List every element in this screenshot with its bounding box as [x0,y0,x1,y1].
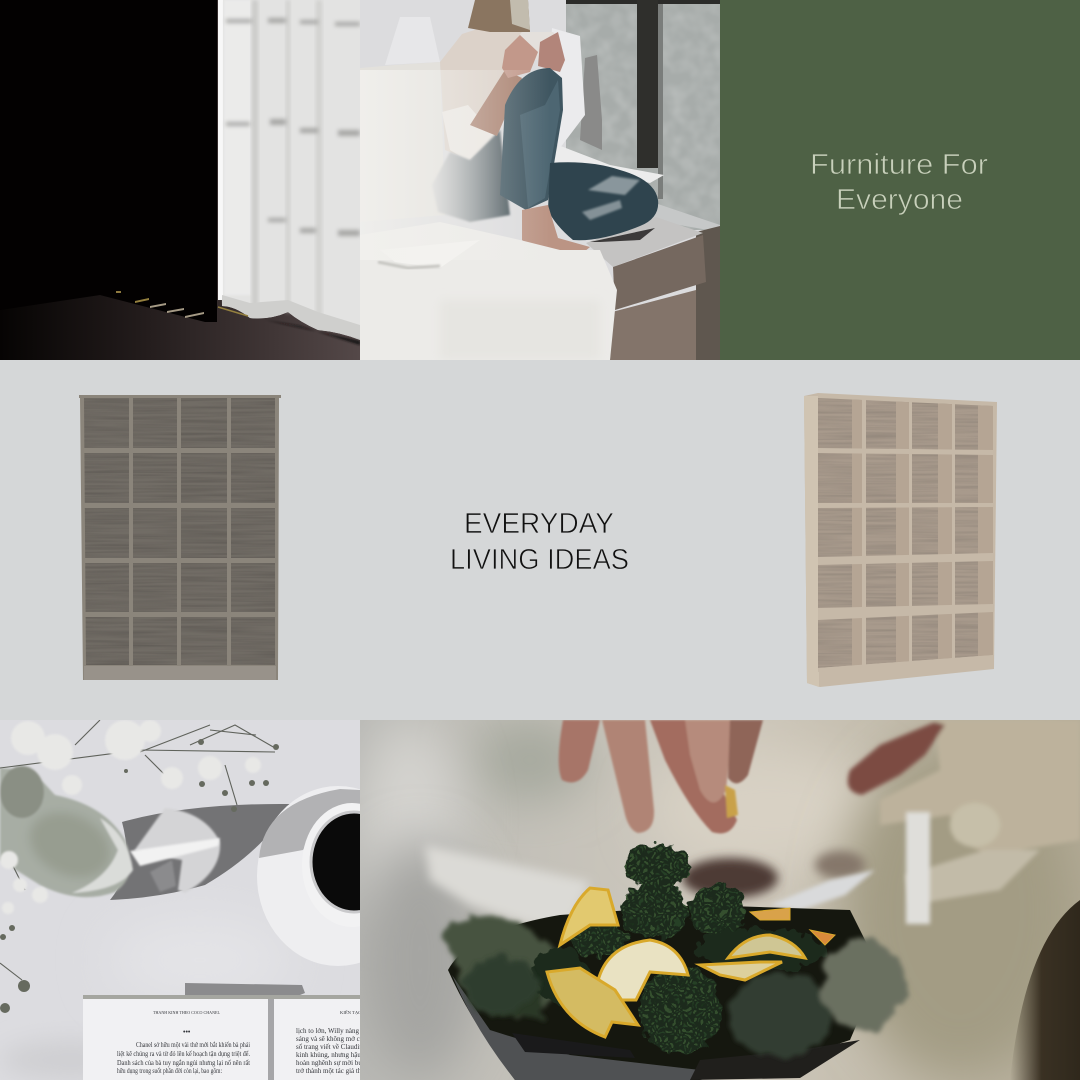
blurred knife [423,844,590,923]
book text: THANH KINH THEO COCO CHANEL [153,1010,220,1015]
shirt [552,28,585,146]
heading: everyday living ideas: LIVING IDEAS [450,544,629,576]
saucer and coffee cup [257,786,360,966]
frame on wall [385,17,440,65]
book text: hữu dụng trong suốt phần đời còn lại, bao gồm: [117,1067,222,1075]
baby's breath flowers [0,720,279,1013]
book text: sáng và sẽ không mở của ch [296,1035,375,1043]
photo: table with flowers, coffee and open book [0,720,360,1080]
heading: everyday living ideas: EVERYDAY [464,508,614,540]
blurred background tones [360,720,1080,1080]
hair [468,0,530,32]
skillet [448,905,880,1080]
light slits at curtain base [116,291,204,318]
dark curtain [26,0,217,322]
shelf: dark wood bookcase [79,395,281,680]
grey cushion and white pillow [580,55,602,150]
heading: furniture for everyone: Everyone [836,184,963,216]
heading: furniture for everyone [810,149,988,216]
book text: lịch to lớn, Willy nàng nhỏ [296,1027,372,1035]
glass shadow [110,804,290,900]
dark blurred corner [1010,900,1080,1080]
window [566,0,720,230]
photo: hands plating greens and lemon [360,720,1080,1080]
book text [117,1010,380,1075]
book text: Danh sách của bà tuy ngắn ngủi nhưng lại nổ nên rất [117,1059,250,1067]
heading: everyday living ideas [450,508,629,576]
panel: green title block [720,0,1080,360]
cup and hands [502,32,565,78]
jeans: folded leg [548,162,658,240]
forearm [470,70,522,136]
book text: hoàn nghênh sự mời bước đ [296,1059,375,1067]
photo: woman with a cup on a sofa [360,0,720,360]
book text: kinh khủng, nhưng hậu hết c [296,1051,376,1059]
photo: dark curtain and sheer window curtain [0,0,360,360]
open book [83,983,380,1080]
book text: KIẾN TẠO [340,1010,362,1015]
glass vase [0,766,133,897]
blurred fork [770,870,875,910]
white throw [360,222,617,360]
book text: liệt kê chúng ra và từ đó lên kế hoạch tận dụng triệt để. [117,1050,250,1058]
shelf: light oak bookcase [804,393,997,687]
book text: ••• [183,1028,191,1036]
foot [522,205,590,250]
jeans: shin [500,68,563,210]
sheer curtain [218,0,360,345]
window seat cushion and sofa [652,204,720,230]
right hand [848,720,1080,905]
book text: Chanel sở hữu một vài thứ mới bắt khiến bà phải [136,1041,250,1049]
book text: số trang viết về Claudine tron [296,1043,380,1051]
heading: furniture for everyone: Furniture For [810,149,988,181]
broccoli greens [532,844,825,1054]
faded white veil on left [360,70,540,243]
left hand fingers [559,720,763,834]
left blurred herbs [445,916,565,1020]
book text: trở thành một tác giả thật [296,1067,366,1075]
lemon slices [547,888,835,1037]
blanket on sofa back [360,62,445,222]
